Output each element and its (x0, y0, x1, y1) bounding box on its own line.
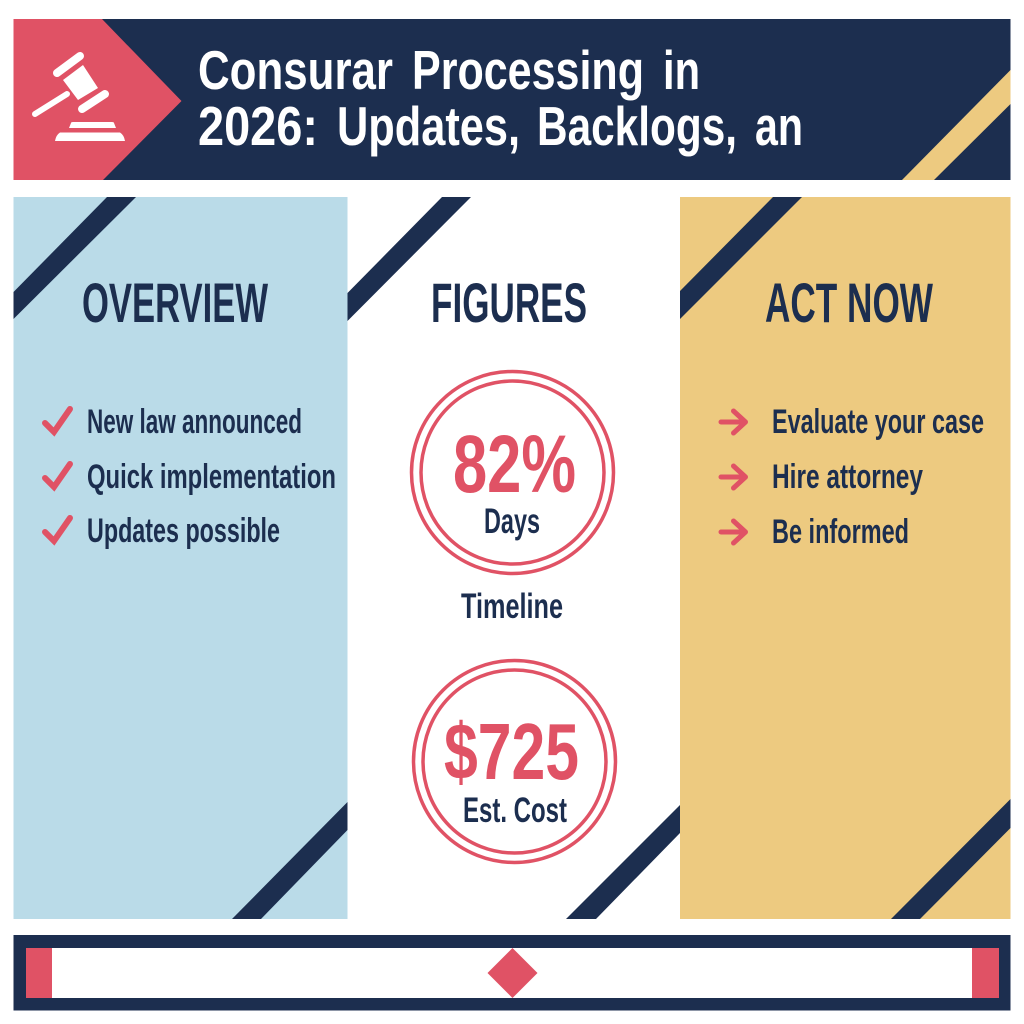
stat: $725 est. cost: Est. Cost (463, 791, 567, 830)
stat: 82% days (412, 372, 614, 574)
stat: 82% days: Days (484, 502, 540, 541)
footer bar (14, 935, 1010, 1010)
panel: figures (348, 197, 680, 919)
stat: $725 est. cost: $725 (444, 707, 579, 796)
list: overview items: Updates possible (87, 512, 280, 550)
icons: arrows (721, 411, 746, 543)
stat: 82% days: 82% (453, 419, 576, 510)
list: action items: Hire attorney (772, 458, 923, 496)
title: Processing (412, 39, 644, 101)
icon: diamond (488, 948, 538, 998)
label: timeline: Timeline (461, 587, 563, 626)
stat: $725 est. cost (414, 660, 616, 862)
gold diagonal stripe (902, 70, 1010, 180)
title: Consurar (198, 39, 393, 101)
list: overview items (87, 403, 336, 550)
header banner (14, 19, 1010, 180)
list: overview items: Quick implementation (87, 458, 336, 496)
list: overview items: New law announced (87, 403, 302, 441)
title: 2026: (198, 95, 318, 157)
title (198, 39, 803, 157)
heading: figures: FIGURES (431, 271, 587, 334)
title: Backlogs, (537, 95, 737, 157)
title: an (755, 95, 803, 157)
panel: overview (14, 197, 348, 919)
icons: check marks (45, 409, 70, 541)
list: action items (772, 403, 984, 551)
icon: gavel (35, 56, 125, 141)
title: in (663, 39, 700, 101)
heading: overview: OVERVIEW (82, 271, 268, 334)
title: Updates, (337, 95, 520, 157)
list: action items: Be informed (772, 513, 909, 551)
panel: act now (680, 197, 1010, 919)
